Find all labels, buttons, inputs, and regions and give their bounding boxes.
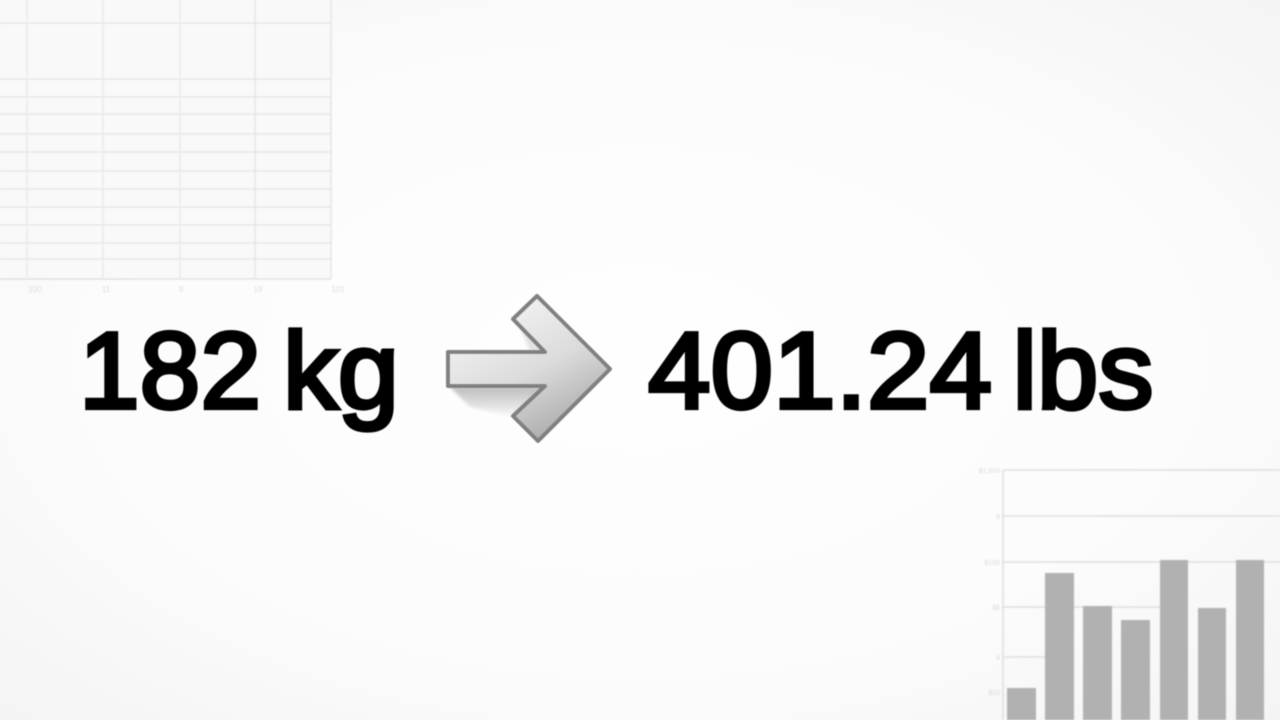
source value: 182 kg bbox=[79, 310, 399, 432]
bar chart background bbox=[979, 468, 1280, 720]
result value: 401.24 lbs: lbs bbox=[1012, 310, 1154, 432]
source value: 182 kg: 182 bbox=[79, 310, 261, 432]
bar chart background: $6 bbox=[992, 605, 1000, 612]
bar chart background: 8 bbox=[996, 514, 1000, 521]
result value: 401.24 lbs: 401.24 bbox=[648, 310, 992, 432]
icon: arrow bbox=[448, 296, 610, 441]
bar chart background: $100 bbox=[984, 560, 1000, 567]
result value: 401.24 lbs bbox=[648, 310, 1154, 432]
bars bbox=[1007, 560, 1264, 720]
spreadsheet table background: 101 bbox=[331, 285, 345, 294]
bar chart background: 4 bbox=[996, 655, 1000, 662]
spreadsheet table background: 11 bbox=[102, 285, 111, 294]
spreadsheet table background: 9 bbox=[179, 285, 184, 294]
spreadsheet table background: 18 bbox=[254, 285, 263, 294]
spreadsheet table background bbox=[0, 0, 345, 294]
spreadsheet table background: 100 bbox=[28, 285, 42, 294]
bar chart background: $1,000 bbox=[979, 468, 1000, 475]
bar chart background: $20 bbox=[988, 690, 1000, 697]
source value: 182 kg: kg bbox=[283, 310, 399, 432]
